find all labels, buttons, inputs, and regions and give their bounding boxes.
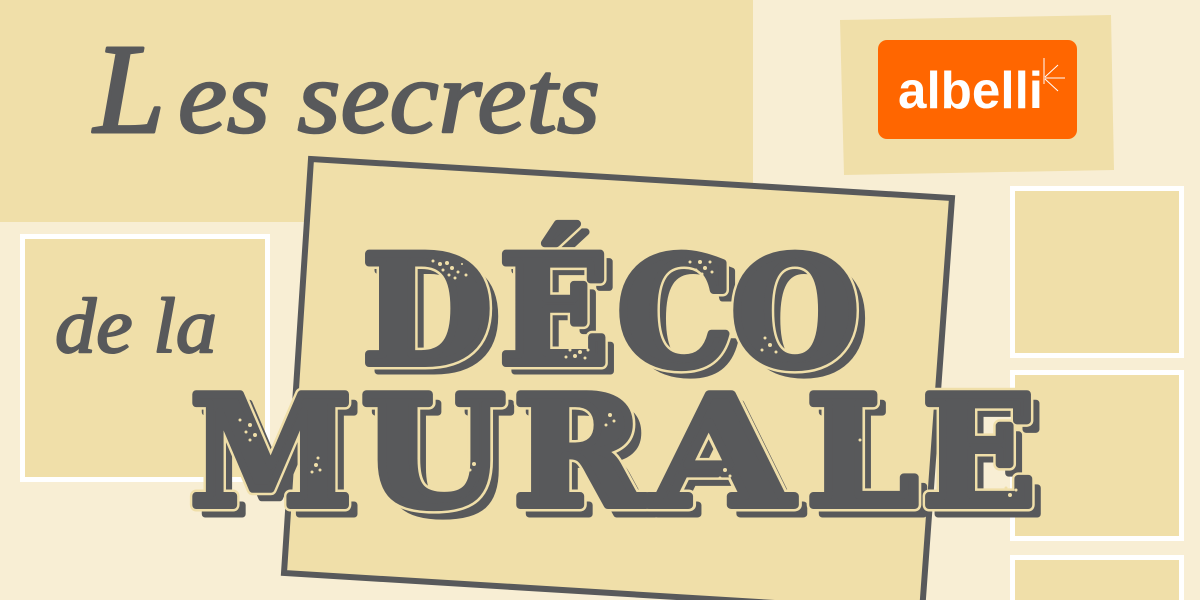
frame: right square 1 bbox=[1012, 188, 1182, 356]
frame: right square 2 bbox=[1012, 372, 1182, 538]
panel: top left banner bbox=[0, 0, 753, 222]
text: de la: de la bbox=[55, 282, 217, 369]
title: DÉCO bbox=[362, 223, 868, 409]
heading: Les secrets bbox=[92, 18, 600, 160]
panel: logo backing bbox=[840, 15, 1114, 175]
texture: MURALE speckles bbox=[238, 413, 1018, 497]
texture: DÉCO speckles bbox=[432, 260, 778, 360]
heading: Les secrets: es secrets bbox=[178, 40, 600, 155]
panel: central tilted frame bbox=[284, 159, 952, 600]
frame: right square 3 bbox=[1012, 558, 1182, 600]
frame: left square bbox=[22, 236, 268, 480]
logo: albelli bbox=[878, 40, 1077, 139]
logo: albelli: albelli bbox=[898, 62, 1043, 120]
title: MURALE bbox=[190, 362, 1045, 550]
heading: Les secrets: L bbox=[92, 18, 165, 160]
